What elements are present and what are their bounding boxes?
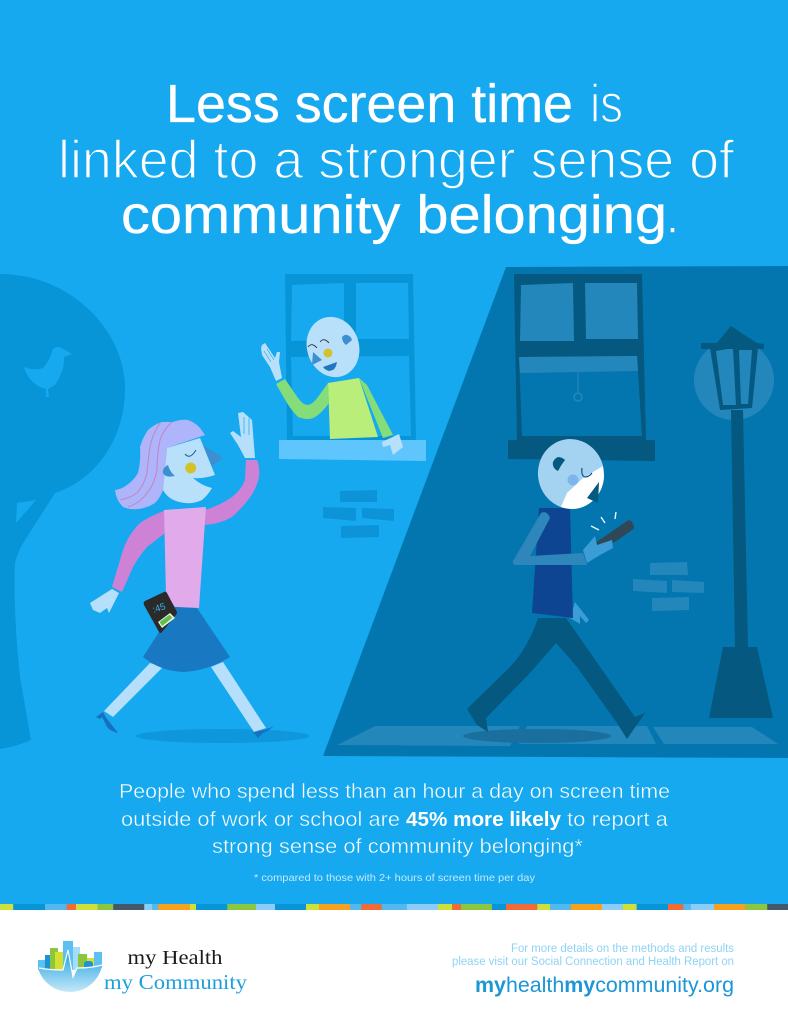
logo wordmark: my Health [128,947,222,969]
colour stripe [0,904,788,910]
neighbour hand on sill [382,434,403,455]
icon: bird [24,347,72,397]
man back hand [570,602,589,624]
icon: smartphone showing 45 minutes: :45 [151,601,167,616]
neighbour waving hand [261,343,282,381]
woman shoes [96,712,274,738]
tree silhouette [0,274,125,749]
street lamp [694,326,774,718]
woman hair [115,420,205,509]
white footer [0,910,788,1024]
title: Less screen time [166,74,573,134]
window sill [279,440,426,461]
man torso [532,508,573,618]
title: is [590,74,623,134]
icon: smartphone showing 45 minutes [144,592,177,633]
caption: 45% more likely [406,809,562,831]
logo: my Health my Community: my Community [104,970,248,994]
neighbour shirt [328,378,378,439]
report note [452,943,734,968]
man with phone [463,434,645,743]
caption: People who spend less than an hour a day on screen time [119,781,670,803]
tree branch gap [16,500,36,523]
logo bowl [38,950,102,992]
logo skyline [38,941,102,970]
left bricks [323,490,394,538]
neighbour face [312,352,322,365]
man hand [583,536,613,563]
dark window [508,274,655,461]
caption: strong sense of community belonging* [212,836,583,858]
logo heartbeat line [39,950,102,977]
woman walking [90,412,310,743]
website url: myhealthmycommunity.org [475,973,734,997]
caption: outside of work or school are [121,809,400,831]
woman shadow [136,729,310,743]
phone glow on face [561,466,604,509]
caption [119,781,670,858]
left window [285,274,416,440]
caption: to report a [567,809,669,831]
title: . [665,185,680,245]
dark shadow area [323,266,788,758]
footnote: * compared to those with 2+ hours of screen time per day [254,872,536,884]
title [58,74,735,245]
man legs [467,618,645,739]
man face [587,482,599,503]
man phone [595,520,634,547]
report note: please visit our Social Connection and Health Report on [452,956,734,968]
woman sleeves [112,460,259,592]
right bricks [633,562,704,611]
sidewalk [337,726,778,746]
report note: For more details on the methods and results [511,943,734,955]
man arm [513,512,587,565]
dark window sill [508,440,655,461]
man head [532,434,610,514]
neighbour waving from window [261,310,393,439]
woman skirt [143,607,230,672]
woman legs [104,663,163,717]
window blind [519,356,638,373]
blind cord [577,371,579,393]
woman face [163,438,215,503]
neighbour arms [276,378,393,438]
woman hands [230,412,255,458]
title: linked to a stronger sense of [58,130,735,190]
title: community belonging [121,185,667,245]
woman shirt [164,507,206,608]
phone notification rays [591,512,616,530]
logo: my Health my Community [38,941,248,994]
neighbour head [299,310,367,384]
man shadow [463,729,611,743]
